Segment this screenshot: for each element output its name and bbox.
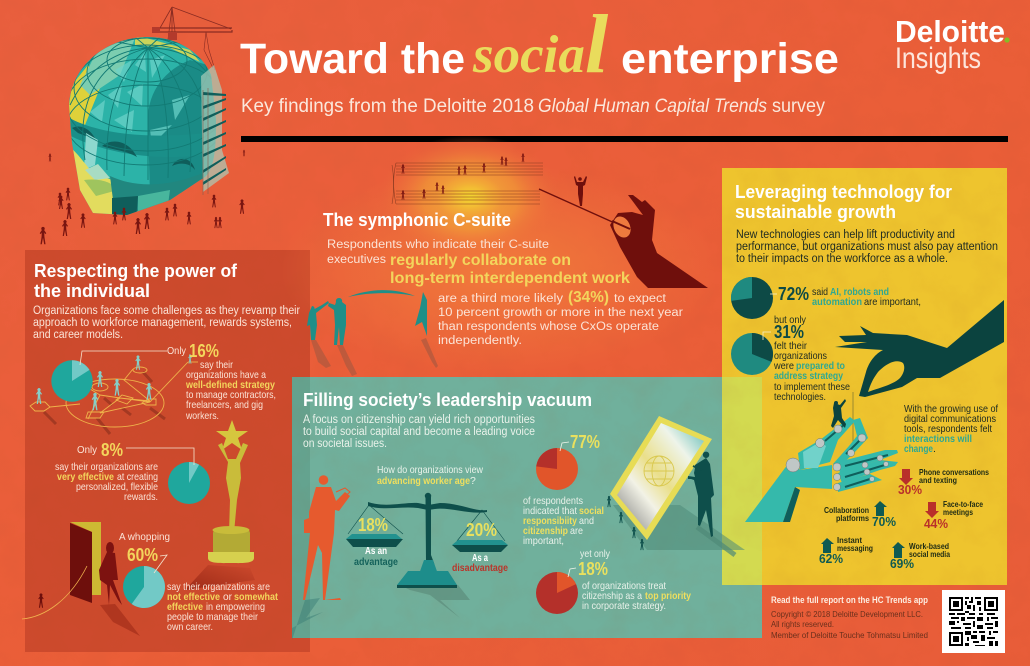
callout: 60 percent: effective	[167, 601, 203, 613]
icon: crane	[152, 7, 232, 70]
callout: 16 percent: to manage contractors,	[186, 389, 276, 401]
subtitle: Key findings from the Deloitte 2018	[241, 96, 534, 117]
panel: filling society's leadership vacuum background	[292, 377, 762, 638]
scale labels	[354, 515, 508, 574]
icon: people around head	[40, 150, 245, 244]
callout: 60 percent: A whopping	[119, 531, 170, 543]
callout: 31 percent: prepared to	[796, 360, 845, 372]
stat: face-to-face down 44 percent: 44%	[924, 516, 948, 531]
shadows	[311, 338, 438, 376]
callout: 77 percent: indicated that	[523, 505, 577, 517]
callout: 8 percent: very effective	[57, 471, 114, 483]
callout: 31 percent: technologies.	[774, 391, 826, 403]
text block: digital communications: change	[904, 443, 933, 455]
glow core	[422, 165, 518, 229]
text block: C-suite finding: than respondents whose CxOs operate	[438, 321, 659, 333]
panel overlap: teal over red	[292, 377, 310, 638]
callout: 60 percent: somewhat	[234, 591, 278, 603]
logo: Deloitte Insights: Deloitte	[895, 14, 1005, 49]
text block: digital communications: .	[933, 443, 936, 455]
callout: 72 percent: AI, robots and	[830, 286, 889, 298]
icon: balance scale	[346, 493, 508, 618]
callout: 8 percent: rewards.	[124, 491, 158, 503]
building scaffold	[201, 65, 229, 195]
icon: conductor hand	[610, 195, 708, 288]
callout: 16 percent	[167, 341, 276, 422]
text block: C-suite finding: regularly collaborate on	[390, 252, 571, 269]
network of contractors	[30, 354, 198, 434]
question text: How do organizations view	[377, 464, 483, 476]
icon: mirror with globe and people	[607, 416, 745, 555]
callout: 60 percent: own career.	[167, 621, 213, 633]
upper hand and thumb	[798, 417, 855, 470]
panel: respecting the power of the individual	[22, 261, 300, 636]
callout: 18 percent: 18%	[578, 559, 608, 579]
icon: music staff with people as notes	[392, 153, 543, 204]
stat: collaboration platforms up 70 percent	[824, 501, 896, 529]
subtitle	[241, 96, 825, 117]
text block: C-suite finding: are a third more likely	[438, 293, 563, 305]
icon: teal figures with shadows	[307, 290, 438, 376]
question text	[377, 464, 483, 487]
panel: the symphonic C-suite	[280, 135, 720, 376]
callout: 60 percent: say their organizations are	[167, 581, 270, 593]
callout: 77 percent: are	[570, 525, 583, 537]
callout: 18 percent: citizenship as a	[582, 590, 642, 602]
lower face	[73, 150, 114, 214]
footer note: Copyright © 2018 Deloitte Development LLC.	[771, 609, 923, 619]
text block: digital communications: interactions will	[904, 433, 972, 445]
forearm and palm	[745, 458, 832, 522]
text block: digital communications	[904, 403, 998, 455]
callout: 60 percent: 60%	[127, 545, 158, 565]
pie chart: 60 percent	[123, 555, 167, 608]
callout: 31 percent: but only	[774, 314, 807, 326]
dome dark side	[148, 60, 216, 193]
callout: 60 percent: or	[223, 591, 232, 603]
pie chart: 18 percent	[536, 568, 578, 614]
text block: intro: on societal issues.	[303, 438, 387, 450]
heading: Toward the: Toward the	[240, 35, 465, 83]
text block: intro: and career models.	[33, 329, 123, 341]
callout: 72 percent: 72%	[778, 284, 809, 304]
question text: ?	[470, 475, 476, 487]
text block: intro: to their impacts on the workforce as a whole.	[736, 253, 948, 265]
icon: trophy	[185, 420, 255, 590]
callout: 31 percent: organizations	[774, 350, 827, 362]
callout: 72 percent	[778, 284, 921, 308]
callout: 60 percent	[119, 531, 278, 633]
callout: 77 percent: citizenship	[523, 525, 568, 537]
callout: 72 percent: automation	[812, 296, 862, 308]
callout: 18 percent: top priority	[645, 590, 691, 602]
callout: 77 percent: 77%	[570, 432, 600, 452]
pie chart: 8 percent	[126, 448, 210, 504]
heading: the individual	[34, 281, 150, 301]
heading: enterprise: enterprise	[621, 35, 839, 83]
illustration: glass dome head with crane	[40, 7, 245, 244]
man	[328, 298, 346, 345]
stat: collaboration platforms up 70 percent: platforms	[836, 513, 869, 523]
panel: leveraging technology	[731, 182, 1004, 571]
heading: Respecting the power of	[34, 261, 238, 281]
woman	[307, 301, 329, 340]
scale labels: advantage	[354, 557, 398, 568]
callout: 16 percent: 16%	[189, 341, 219, 361]
stat: face-to-face down 44 percent	[924, 499, 983, 531]
grid lines	[70, 38, 212, 180]
stat: phone conversations down 30 percent: and texting	[919, 475, 957, 485]
icon: orange man with briefcase	[292, 475, 350, 640]
stat: phone conversations down 30 percent	[898, 467, 989, 497]
stat: face-to-face down 44 percent: meetings	[943, 507, 973, 517]
subtitle: Global Human Capital Trends	[538, 96, 767, 117]
footer note: Member of Deloitte Touche Tohmatsu Limited	[771, 630, 928, 640]
panel: respecting the power of the individual background	[25, 250, 310, 652]
panel: filling society's leadership vacuum	[292, 390, 745, 640]
callout: 16 percent: well-defined strategy	[185, 379, 275, 391]
icon: conductor on baton	[539, 176, 628, 229]
panel: leveraging technology background	[722, 168, 1007, 585]
scale labels: disadvantage	[452, 563, 508, 574]
stat: instant messaging up 62 percent: Instant	[837, 535, 862, 545]
three fingers	[838, 450, 898, 473]
callout: 77 percent: and	[579, 515, 594, 527]
callout: 16 percent: Only	[167, 345, 187, 357]
callout: 60 percent: not effective	[167, 591, 220, 603]
callout: 77 percent	[523, 432, 611, 560]
callout: 16 percent: organizations have a	[186, 369, 266, 381]
stat: phone conversations down 30 percent: 30%	[898, 482, 922, 497]
text block: C-suite finding: (34%)	[568, 289, 609, 306]
dome light panes	[90, 52, 190, 145]
callout: 31 percent: felt their	[774, 340, 807, 352]
logo: Deloitte Insights: Insights	[895, 42, 981, 75]
scale labels: As an	[365, 546, 387, 557]
stat: instant messaging up 62 percent: 62%	[819, 551, 843, 566]
footer note: Read the full report on the HC Trends app	[771, 595, 928, 605]
text block: C-suite finding: to expect	[614, 293, 667, 305]
curved finger	[833, 418, 868, 468]
pie chart: 72 percent	[731, 277, 777, 319]
callout: 8 percent: say their organizations are	[55, 461, 158, 473]
callout: 18 percent: of organizations treat	[582, 580, 666, 592]
stat: instant messaging up 62 percent	[819, 535, 873, 566]
scale labels: 18%	[358, 515, 388, 535]
text block: C-suite finding: long-term interdependent work	[390, 270, 630, 287]
callout: 60 percent: people to manage their	[167, 611, 258, 623]
heading	[34, 261, 238, 301]
text block: intro: approach to workforce management, rewards systems,	[33, 317, 292, 329]
callout: 31 percent: were	[773, 360, 794, 372]
text block: C-suite finding: executives	[327, 254, 386, 266]
heading	[735, 182, 952, 222]
callout: 77 percent: yet only	[580, 548, 611, 560]
text block: C-suite finding: independently.	[438, 335, 522, 347]
subtitle: survey	[772, 96, 825, 117]
text block: intro: to build social capital and become a leading voice	[303, 426, 535, 438]
third figure	[415, 292, 427, 336]
text block: intro	[303, 414, 535, 450]
stat: collaboration platforms up 70 percent: Collaboration	[824, 505, 869, 515]
callout: 16 percent: say their	[200, 359, 233, 371]
heading: Leveraging technology for	[735, 182, 952, 202]
left pan	[346, 505, 403, 547]
text block: intro: Organizations face some challenges as they revamp their	[33, 305, 300, 317]
callout: 8 percent: at creating	[117, 471, 158, 483]
callout: 72 percent: are important,	[864, 296, 921, 308]
scale labels: As a	[472, 553, 488, 564]
callout: 77 percent: social	[579, 505, 604, 517]
right pan	[452, 510, 508, 552]
icon: human hand pinching	[835, 300, 1004, 445]
text block: C-suite finding	[327, 239, 683, 347]
callout: 8 percent: 8%	[101, 440, 123, 460]
title	[240, 0, 839, 91]
footer note	[771, 595, 928, 640]
text block: digital communications: With the growing use of	[904, 403, 998, 415]
icon: robot hand	[745, 399, 898, 522]
text block: C-suite finding: Respondents who indicate their C-suite	[327, 239, 549, 251]
stat: work-based social media up 69 percent: 69%	[890, 556, 914, 571]
pie chart: 77 percent	[536, 442, 578, 490]
panel overlap: yellow over teal	[722, 377, 762, 585]
wide lighter wash	[280, 165, 720, 375]
glow behind staff	[380, 135, 560, 259]
logo: Deloitte Insights	[895, 14, 1010, 75]
stat: work-based social media up 69 percent	[890, 541, 950, 571]
heading: Filling society’s leadership vacuum	[303, 390, 592, 410]
pie chart: 16 percent	[51, 351, 167, 402]
pie chart: 31 percent	[731, 332, 773, 375]
stat: instant messaging up 62 percent: messaging	[837, 543, 873, 553]
text block: digital communications: digital communications	[904, 413, 996, 425]
callout: 31 percent: 31%	[774, 322, 804, 342]
callout: 8 percent: Only	[77, 444, 98, 456]
text block: intro	[33, 305, 300, 341]
heading: sustainable growth	[735, 202, 896, 222]
callout: 18 percent	[578, 559, 691, 612]
text block: C-suite finding: 10 percent growth or more in the next year	[438, 307, 683, 319]
head details	[69, 37, 216, 215]
eye band	[70, 118, 216, 156]
heading: The symphonic C-suite: The symphonic C-suite	[323, 210, 511, 230]
text block: intro: A focus on citizenship can yield rich opportunities	[303, 414, 535, 426]
callout: 77 percent: of respondents	[523, 495, 583, 507]
heading: social: social	[472, 0, 609, 91]
divider rule	[241, 136, 1008, 142]
callout: 72 percent: said	[812, 286, 828, 298]
callout: 31 percent: to implement these	[774, 381, 850, 393]
callout: 77 percent: responsibiity	[523, 515, 577, 527]
arc	[348, 290, 415, 297]
question text: advancing worker age	[377, 475, 470, 487]
footer note: All rights reserved.	[771, 619, 834, 629]
text block: intro: performance, but organizations must also pay attention	[736, 241, 998, 253]
text block: intro	[736, 229, 998, 265]
text block: digital communications: tools, respondents felt	[904, 423, 992, 435]
stat: collaboration platforms up 70 percent: 70%	[872, 514, 896, 529]
callout: 31 percent: address strategy	[774, 370, 843, 382]
head base shape	[69, 37, 216, 215]
callout: 16 percent: freelancers, and gig	[186, 399, 263, 411]
callout: 31 percent	[773, 314, 850, 403]
icon: QR code	[942, 590, 1005, 653]
stat: work-based social media up 69 percent: Work-based	[909, 541, 949, 551]
callout: 18 percent: in corporate strategy.	[582, 600, 666, 612]
stat: phone conversations down 30 percent: Phone conversations	[919, 467, 989, 477]
callout: 8 percent	[55, 440, 158, 503]
callout: 77 percent: important,	[523, 535, 564, 547]
small figure on robot finger	[831, 399, 846, 428]
icon: door with woman	[22, 522, 140, 636]
callout: 16 percent: workers.	[185, 410, 219, 422]
text block: intro: New technologies can help lift productivity and	[736, 229, 955, 241]
callout: 60 percent: in empowering	[206, 601, 265, 613]
stat: work-based social media up 69 percent: social media	[909, 549, 950, 559]
callout: 8 percent: personalized, flexible	[76, 481, 158, 493]
stat: face-to-face down 44 percent: Face-to-face	[943, 499, 983, 509]
scale labels: 20%	[466, 520, 497, 540]
dome yellow tint	[66, 65, 100, 125]
